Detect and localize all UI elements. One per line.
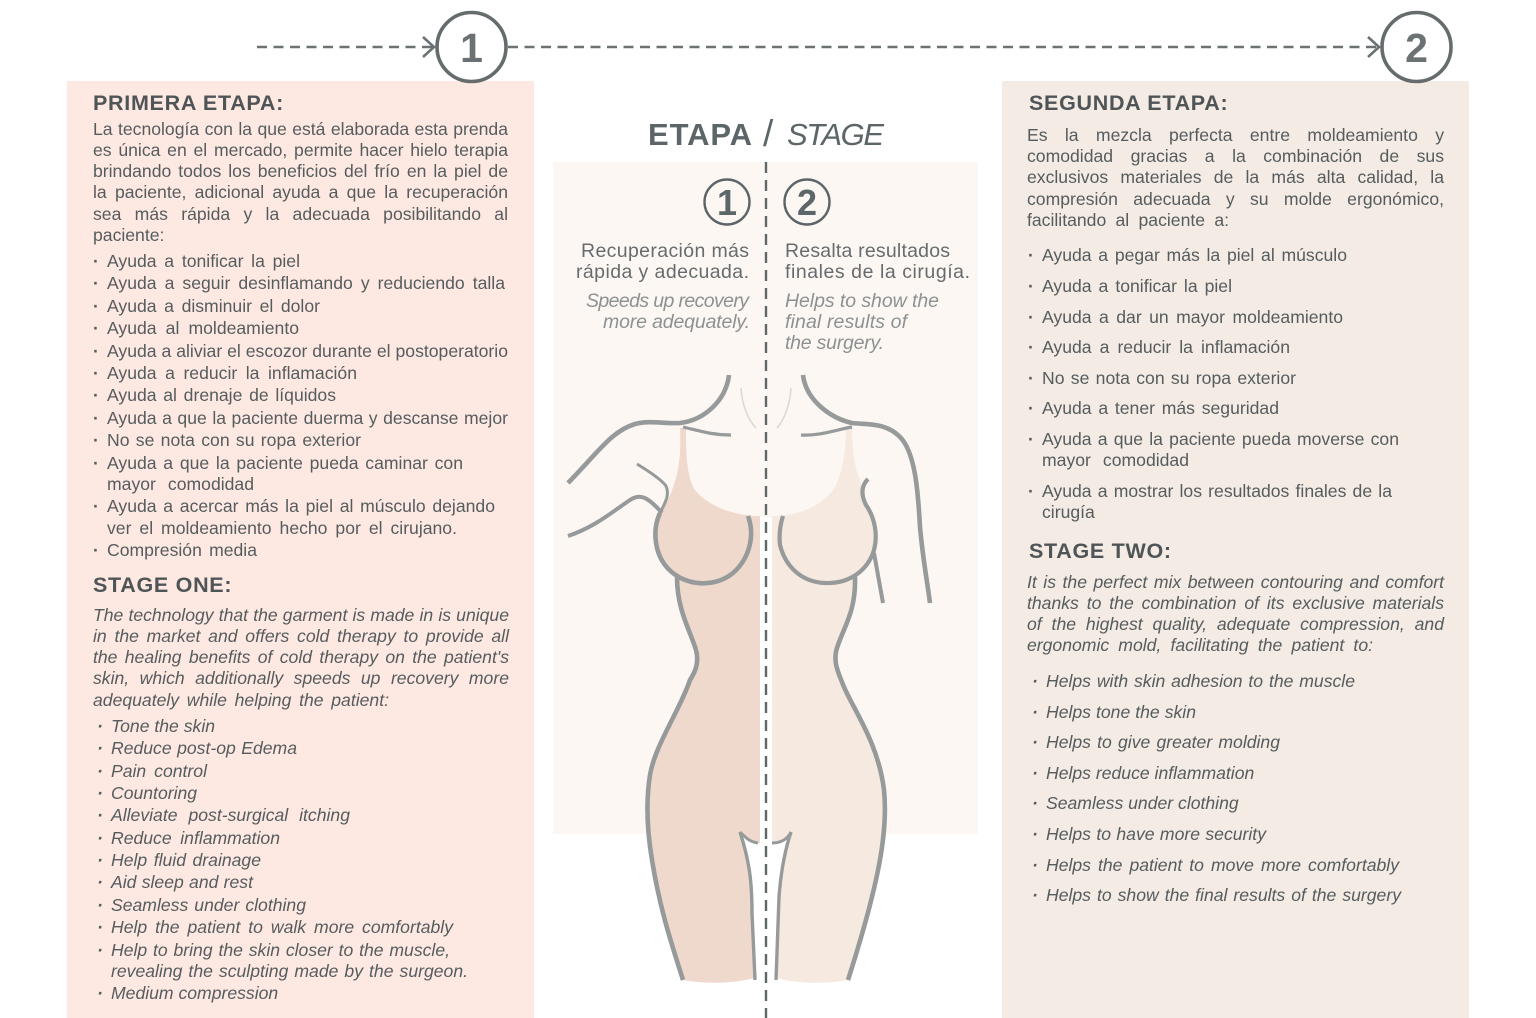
list: stage one benefits: Pain control — [111, 761, 207, 781]
list: beneficios primera etapa: Ayuda al moldeamiento — [107, 318, 299, 338]
icon: step 1 circle: 1 — [460, 25, 483, 71]
text block: primera etapa description: paciente: — [93, 225, 164, 245]
heading: stage one: STAGE ONE: — [93, 573, 232, 597]
icon: step 2 circle: 2 — [1405, 25, 1428, 71]
text block: segunda etapa description: comodidad gracias a la combinación de sus — [1027, 146, 1444, 166]
text block: stage 2 summary: Helps to show the — [785, 290, 939, 312]
text block: stage one description: adequately while helping the patient: — [93, 690, 389, 710]
outline: left body — [568, 375, 758, 980]
list: beneficios segunda etapa: Ayuda a mostrar los resultados finales de la — [1042, 481, 1392, 501]
list: beneficios segunda etapa: Ayuda a que la paciente pueda moverse con — [1042, 429, 1399, 449]
text block: stage 1 summary: Recuperación más — [581, 240, 749, 262]
title: etapa / stage — [648, 113, 884, 154]
text block: primera etapa description — [93, 119, 508, 245]
list: stage two benefits: Helps to show the final results of the surgery — [1046, 885, 1401, 905]
list: stage one benefits: Help to bring the skin closer to the muscle, — [111, 940, 450, 960]
text block: stage 1 summary: rápida y adecuada. — [576, 261, 749, 283]
list: beneficios segunda etapa: Ayuda a reducir la inflamación — [1042, 337, 1290, 357]
arrow: dashed timeline to step 1 — [257, 37, 434, 57]
text block: primera etapa description: La tecnología con la que está elaborada esta prenda — [93, 119, 508, 139]
text block: stage two description: of the highest quality, adequate compression, and — [1027, 614, 1444, 634]
heading: primera etapa: PRIMERA ETAPA: — [93, 91, 284, 115]
text block: primera etapa description: es única en el mercado, permite hacer hielo terapia — [93, 140, 508, 160]
list: beneficios segunda etapa: Ayuda a tener más seguridad — [1042, 398, 1279, 418]
text block: stage two description: ergonomic mold, facilitating the patient to: — [1027, 635, 1373, 655]
text block: stage one description: The technology that the garment is made in is unique — [93, 605, 509, 625]
outline: right body — [772, 375, 930, 980]
list: beneficios primera etapa: Ayuda a que la paciente duerma y descanse mejor — [107, 408, 508, 428]
list: stage one benefits: Alleviate post-surgical itching — [111, 805, 350, 825]
icon: small circled 2 — [784, 180, 830, 224]
list: stage two benefits: Helps to have more security — [1046, 824, 1266, 844]
text block: stage 2 summary: Resalta resultados — [785, 240, 950, 262]
text block: stage 2 summary: finales de la cirugía. — [785, 261, 970, 283]
list: stage one benefits: Countoring — [111, 783, 197, 803]
list: stage two benefits: Helps with skin adhesion to the muscle — [1046, 671, 1355, 691]
text block: stage two description: thanks to the combination of its exclusive materials — [1027, 593, 1444, 613]
icon: step 1 circle — [437, 12, 506, 82]
list: beneficios segunda etapa: cirugía — [1042, 502, 1095, 522]
text block: stage one description — [93, 605, 510, 710]
list: beneficios segunda etapa: Ayuda a dar un mayor moldeamiento — [1042, 307, 1343, 327]
text block: stage two description — [1027, 572, 1445, 655]
text block: stage 1 summary: Speeds up recovery — [586, 290, 750, 312]
text block: stage 2 summary — [785, 240, 970, 354]
text block: primera etapa description: sea más rápida y la adecuada posibilitando al — [93, 204, 508, 224]
list: stage two benefits: Helps reduce inflammation — [1046, 763, 1254, 783]
list: beneficios segunda etapa: No se nota con su ropa exterior — [1042, 368, 1296, 388]
list: beneficios primera etapa: Compresión media — [107, 540, 257, 560]
title: etapa / stage: ETAPA — [648, 117, 752, 152]
list: stage two benefits: Helps to give greater molding — [1046, 732, 1280, 752]
icon: small circled 1 — [704, 180, 750, 224]
list: stage one benefits — [98, 716, 468, 1003]
list: beneficios primera etapa: Ayuda a disminuir el dolor — [107, 296, 320, 316]
text block: stage one description: skin, which additionally speeds up recovery more — [93, 668, 509, 688]
list: stage one benefits: Seamless under clothing — [111, 895, 306, 915]
list: beneficios primera etapa: mayor comodidad — [107, 474, 254, 494]
list: beneficios primera etapa: Ayuda a reducir la inflamación — [107, 363, 357, 383]
list: beneficios primera etapa: ver el moldeamiento hecho por el cirujano. — [107, 518, 457, 538]
icon: small circled 2: 2 — [797, 182, 817, 223]
list: stage one benefits: Aid sleep and rest — [111, 872, 253, 892]
list: beneficios primera etapa: Ayuda a acercar más la piel al músculo dejando — [107, 496, 495, 516]
text block: primera etapa description: la paciente, adicional ayuda a que la recuperación — [93, 182, 508, 202]
list: beneficios segunda etapa: mayor comodidad — [1042, 450, 1189, 470]
icon: small circled 1: 1 — [717, 182, 737, 223]
text block: primera etapa description: brindando todos los beneficios del frío en la piel de — [93, 161, 508, 181]
list: beneficios segunda etapa: Ayuda a tonificar la piel — [1042, 276, 1232, 296]
illustration: garment body — [568, 375, 930, 983]
list: beneficios segunda etapa: Ayuda a pegar más la piel al músculo — [1042, 245, 1347, 265]
strip: white center gap — [760, 517, 772, 837]
text block: stage two description: It is the perfect mix between contouring and comfort — [1027, 572, 1444, 592]
list: beneficios primera etapa: Ayuda a aliviar el escozor durante el postoperatorio — [107, 341, 508, 361]
text block: stage 2 summary: final results of — [785, 311, 910, 333]
list: stage one benefits: Medium compression — [111, 983, 278, 1003]
title: etapa / stage: / — [763, 113, 774, 154]
list: stage one benefits: Reduce post-op Edema — [111, 738, 297, 758]
list: beneficios primera etapa: Ayuda a seguir desinflamando y reduciendo talla — [107, 273, 505, 293]
panel: segunda etapa — [1002, 81, 1469, 1018]
list: stage one benefits: Help fluid drainage — [111, 850, 261, 870]
list: beneficios segunda etapa — [1029, 245, 1399, 522]
arrow: dashed timeline to step 2 — [508, 37, 1379, 57]
divider: dashed center line — [765, 162, 767, 1018]
list: beneficios primera etapa: No se nota con su ropa exterior — [107, 430, 361, 450]
text block: stage 2 summary: the surgery. — [785, 332, 884, 354]
text block: segunda etapa description: facilitando al paciente a: — [1027, 210, 1229, 230]
list: stage one benefits: Tone the skin — [111, 716, 215, 736]
heading: stage two: STAGE TWO: — [1029, 539, 1172, 563]
list: stage two benefits: Helps tone the skin — [1046, 702, 1196, 722]
icon: step 2 circle — [1382, 12, 1451, 82]
list: stage two benefits: Helps the patient to move more comfortably — [1046, 855, 1399, 875]
list: stage one benefits: Reduce inflammation — [111, 828, 280, 848]
text block: stage 1 summary: more adequately. — [603, 311, 750, 333]
list: stage one benefits: Help the patient to walk more comfortably — [111, 917, 453, 937]
text block: segunda etapa description — [1027, 125, 1444, 230]
heading: segunda etapa: SEGUNDA ETAPA: — [1029, 91, 1228, 115]
neck lines — [741, 388, 791, 428]
list: beneficios primera etapa: Ayuda a que la paciente pueda caminar con — [107, 453, 463, 473]
list: stage one benefits: revealing the sculpting made by the surgeon. — [111, 961, 468, 981]
list: stage two benefits — [1034, 671, 1402, 905]
text block: stage one description: the healing benefits of cold therapy on the patient's — [93, 647, 509, 667]
text block: segunda etapa description: exclusivos materiales de la más alta calidad, la — [1027, 167, 1444, 187]
text block: segunda etapa description: compresión adecuada y su molde ergonómico, — [1027, 189, 1444, 209]
panel: primera etapa — [67, 81, 534, 1018]
list: stage two benefits: Seamless under clothing — [1046, 793, 1239, 813]
text block: stage one description: in the market and offers cold therapy to provide all — [93, 626, 509, 646]
list: beneficios primera etapa: Ayuda al drenaje de líquidos — [107, 385, 336, 405]
garment: left half stage 1 — [648, 428, 760, 983]
garment: right half stage 2 — [772, 428, 885, 983]
title: etapa / stage: STAGE — [787, 117, 884, 152]
list: beneficios primera etapa: Ayuda a tonificar la piel — [107, 251, 300, 271]
text block: stage 1 summary — [576, 240, 750, 333]
panel: center background — [553, 162, 978, 834]
list: beneficios primera etapa — [94, 251, 508, 560]
text block: segunda etapa description: Es la mezcla perfecta entre moldeamiento y — [1027, 125, 1444, 145]
